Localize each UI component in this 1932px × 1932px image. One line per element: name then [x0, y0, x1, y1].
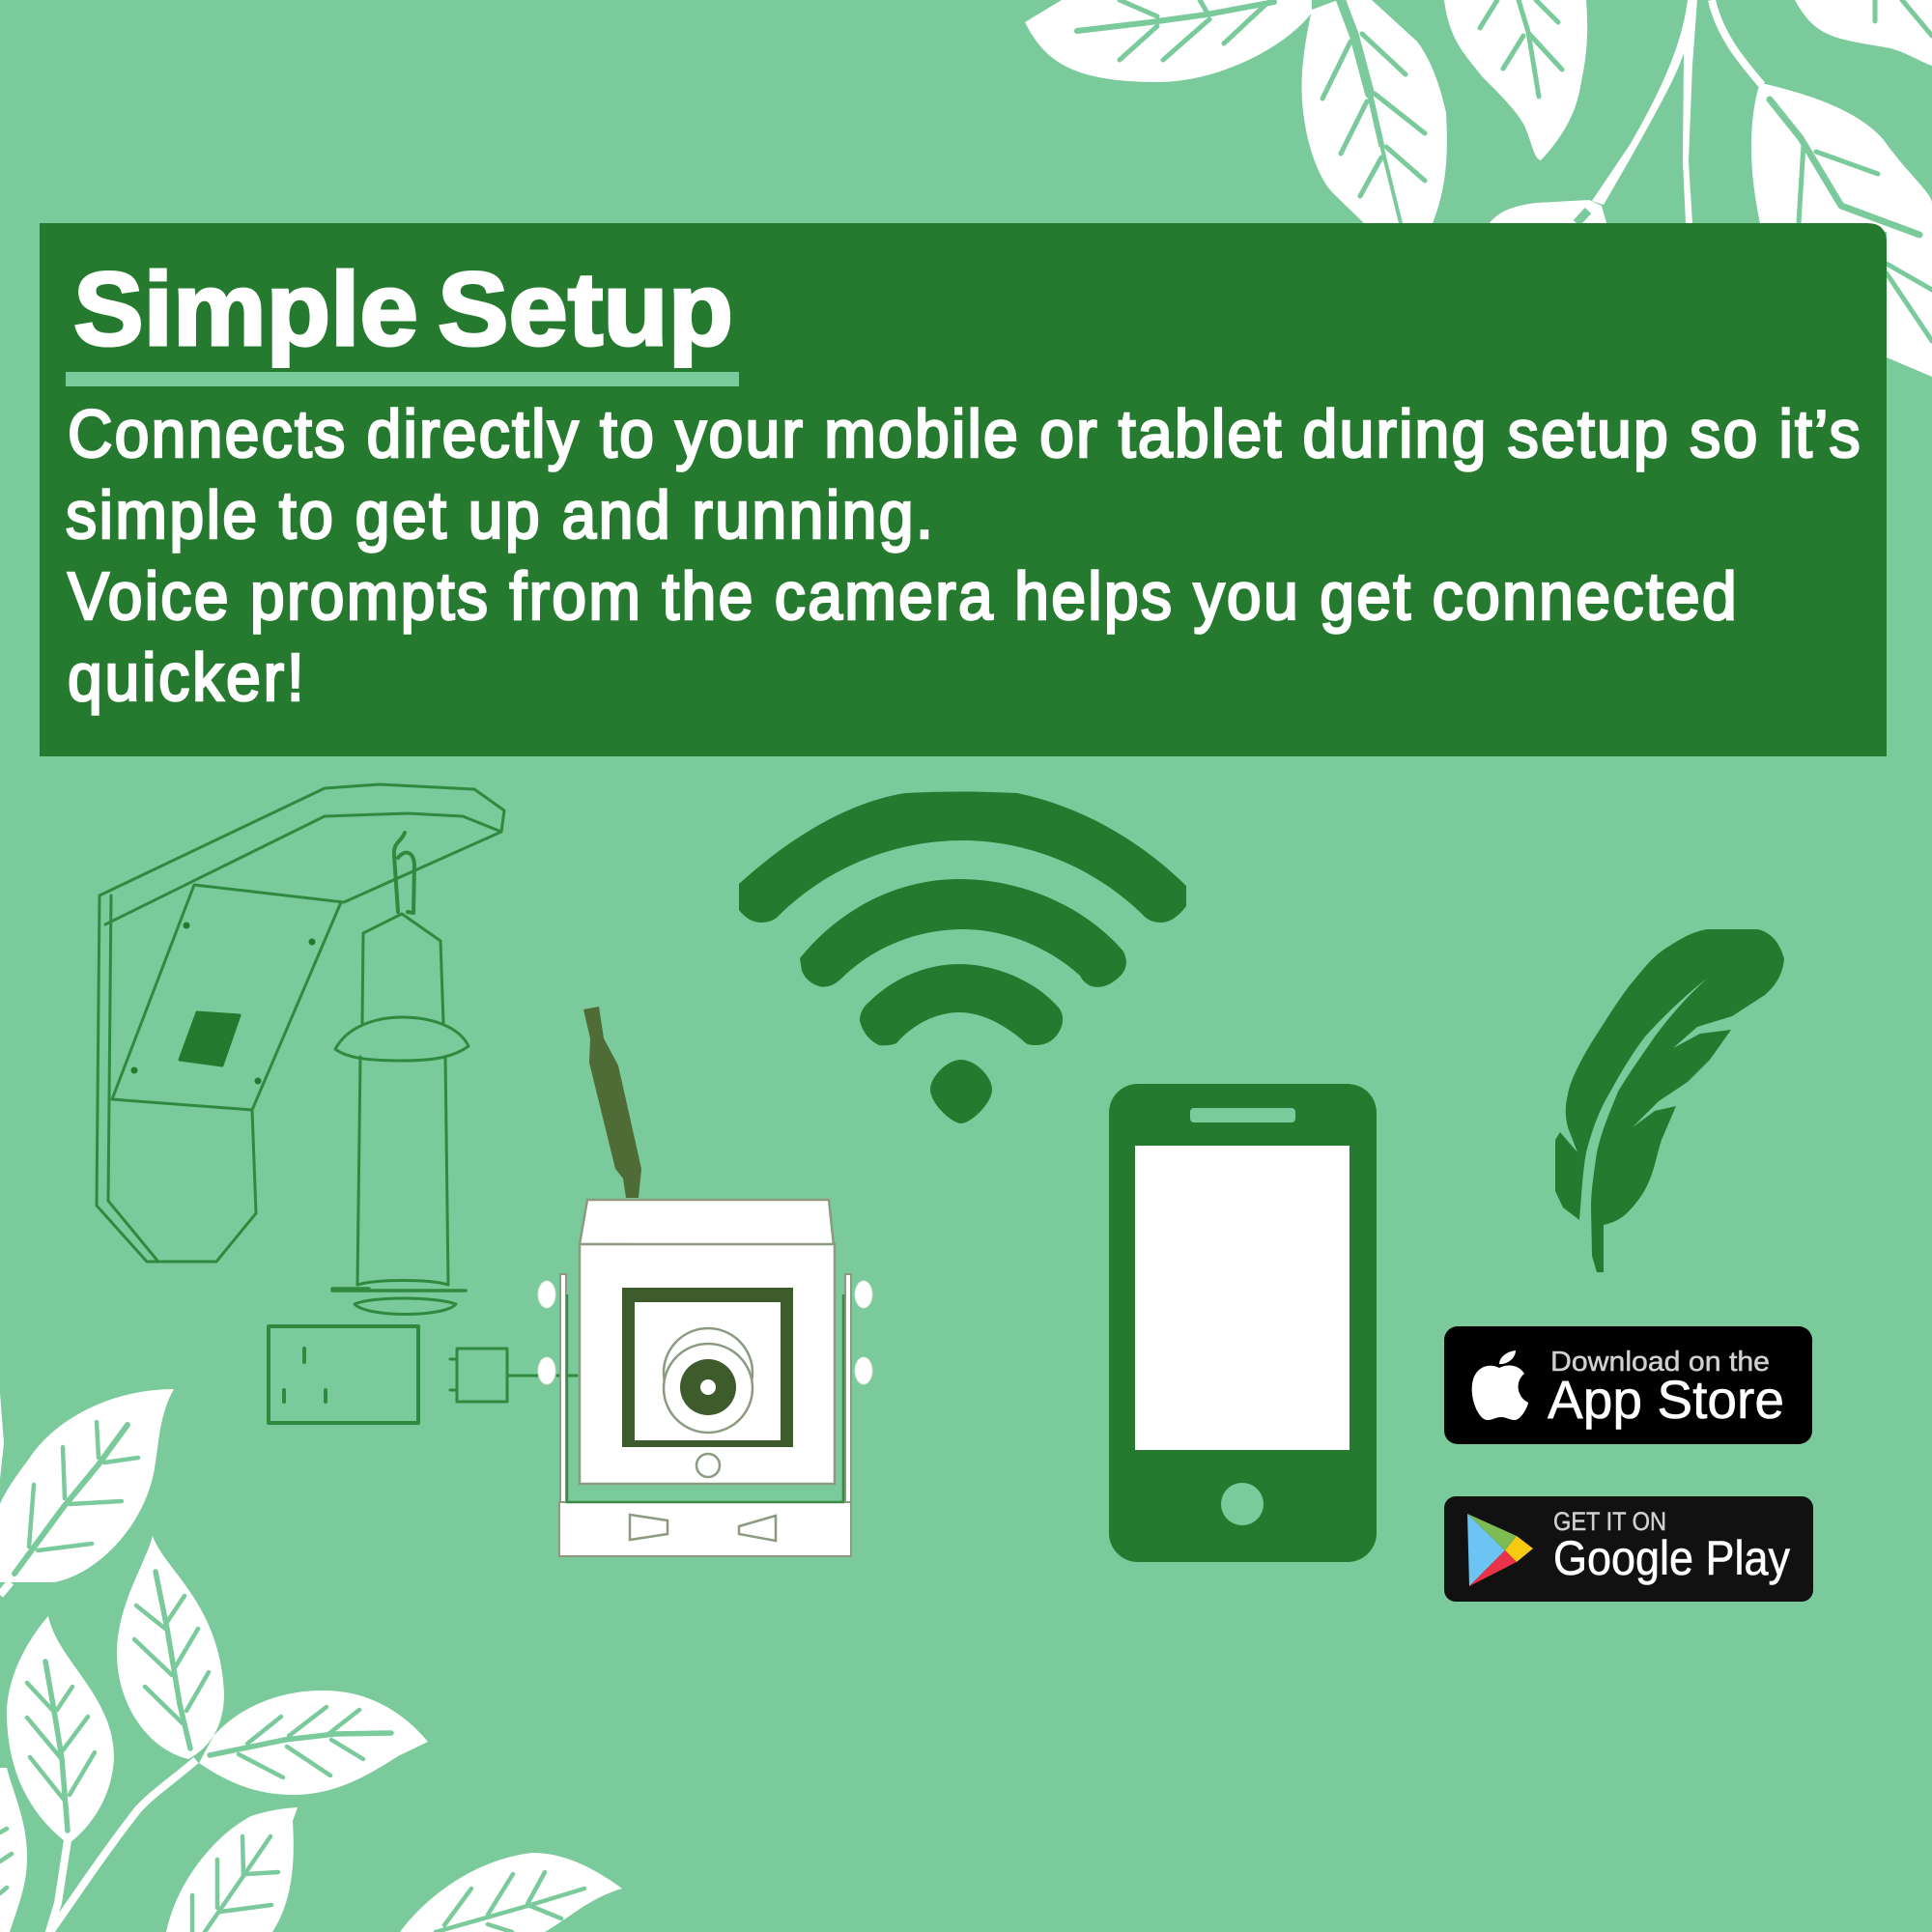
badge: app store: [1444, 1326, 1812, 1444]
lens frame: [622, 1288, 793, 1447]
body: [580, 1244, 835, 1484]
badge: google play: [1444, 1496, 1813, 1602]
base arrows: [630, 1515, 776, 1541]
heading: Setup: [438, 250, 733, 367]
bottom-left leaf cluster: [0, 1389, 622, 1932]
description text: Connects directly to your mobile or tablet during setup so it’s: [68, 397, 1861, 472]
shelter: [97, 784, 504, 1262]
description text: [66, 397, 1861, 716]
description text: quicker!: [68, 640, 304, 716]
icon: wildlife camera: [538, 1007, 872, 1556]
description text: simple to get up and running.: [66, 478, 933, 554]
icon: wifi: [739, 792, 1186, 1123]
badge: app store: Download on the: [1550, 1347, 1770, 1378]
icon: smartphone: [1109, 1084, 1377, 1562]
panel background: [40, 223, 1887, 756]
heading: Simple: [73, 250, 418, 367]
heading underline: [66, 372, 739, 386]
panel: simple setup: [40, 223, 1887, 756]
icon: bird feeder and shelter line drawing: [97, 784, 577, 1423]
heading: [73, 250, 733, 367]
socket: [269, 1326, 418, 1423]
hanging feeder: [332, 833, 469, 1314]
indicator: [696, 1454, 720, 1477]
icon: play triangle: [1467, 1514, 1533, 1586]
plug adapter: [450, 1349, 577, 1402]
icon: feather: [1555, 929, 1784, 1272]
badge: app store: App Store: [1548, 1369, 1784, 1430]
top-right leaf cluster: [1025, 0, 1932, 377]
hood: [580, 1200, 834, 1245]
knobs: [538, 1281, 872, 1384]
badge: google play: Google Play: [1553, 1531, 1790, 1585]
bracket: [559, 1274, 851, 1556]
lens: [664, 1328, 753, 1433]
antenna: [583, 1007, 641, 1198]
description text: Voice prompts from the camera helps you get connected: [68, 559, 1737, 635]
icon: apple logo: [1472, 1350, 1528, 1420]
badge: google play: GET IT ON: [1553, 1507, 1666, 1536]
